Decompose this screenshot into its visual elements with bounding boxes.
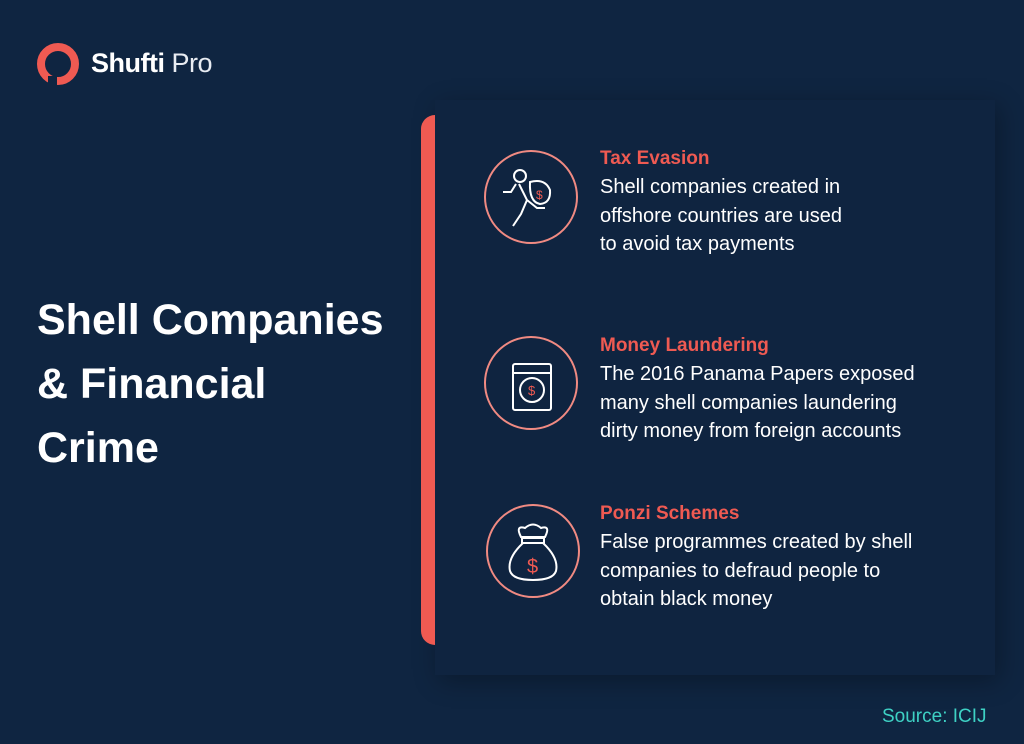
icon: running thief: $: [536, 188, 543, 202]
text: ponzi schemes: False programmes created by shell: [600, 531, 912, 553]
icon: money bag: [486, 504, 580, 598]
text: ponzi schemes: Ponzi Schemes: [600, 503, 739, 524]
text: money laundering: dirty money from foreign accounts: [600, 420, 901, 442]
item: money laundering: [484, 335, 915, 442]
item: tax evasion: [484, 148, 842, 255]
panel background: [435, 100, 995, 675]
text: money laundering: [600, 335, 915, 442]
text: tax evasion: [600, 148, 842, 255]
icon: washing machine: [484, 336, 578, 430]
text: tax evasion: to avoid tax payments: [600, 233, 795, 255]
icon: running thief: [484, 150, 578, 244]
icon: money bag: $: [527, 556, 538, 578]
text: ponzi schemes: companies to defraud people to: [600, 560, 880, 582]
text: ponzi schemes: [600, 503, 912, 610]
title: & Financial: [37, 360, 266, 408]
text: tax evasion: Tax Evasion: [600, 148, 709, 169]
icon: washing machine: $: [528, 383, 536, 398]
red accent bar: [421, 115, 435, 645]
title: [37, 296, 383, 472]
text: ponzi schemes: obtain black money: [600, 588, 772, 610]
text: money laundering: many shell companies laundering: [600, 392, 897, 414]
logo: Shufti Pro: [91, 48, 212, 78]
source: Source: ICIJ: [882, 706, 987, 727]
title: Shell Companies: [37, 296, 383, 344]
text: money laundering: Money Laundering: [600, 335, 769, 356]
text: tax evasion: offshore countries are used: [600, 204, 842, 226]
text: money laundering: The 2016 Panama Papers exposed: [600, 363, 915, 385]
logo: [37, 43, 212, 85]
text: tax evasion: Shell companies created in: [600, 176, 840, 198]
title: Crime: [37, 424, 159, 472]
item: ponzi schemes: [486, 503, 912, 610]
